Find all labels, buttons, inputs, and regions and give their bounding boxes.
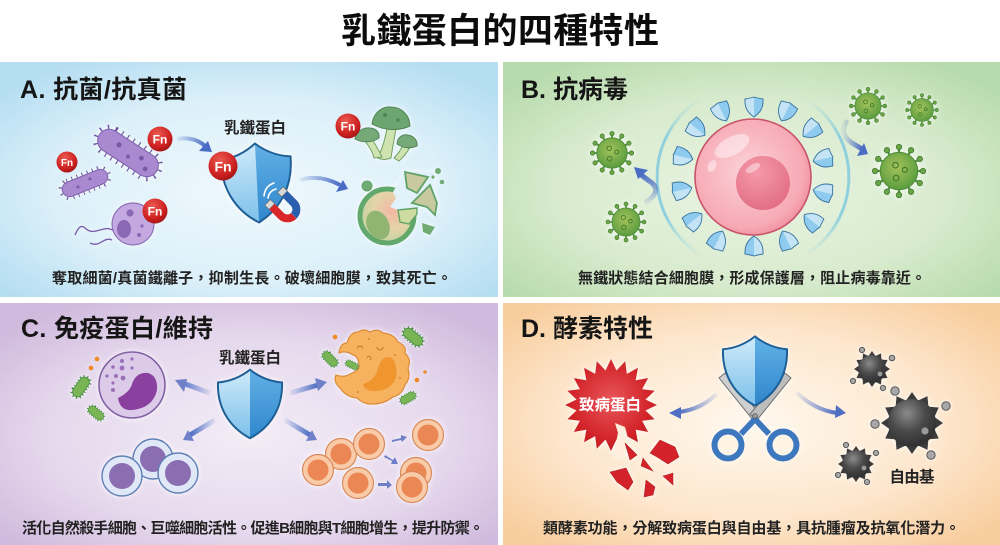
icon: virus right top <box>849 87 887 125</box>
icon: Fn badge left: Fn <box>61 158 73 169</box>
arrow: repelled virus right <box>843 120 868 156</box>
caption A: 奪取細菌/真菌鐵離子，抑制生長。破壞細胞膜，致其死亡。 <box>52 269 452 287</box>
icon: Fn badge top <box>148 126 172 152</box>
heading B: B. 抗病毒 <box>521 75 628 104</box>
icon: Fn badge bottom <box>142 198 168 224</box>
icon: central shield <box>218 370 282 438</box>
protective ring <box>657 98 849 256</box>
arrow: shield to fungi <box>300 178 348 192</box>
arrow: to NK cell <box>175 379 210 393</box>
icon: macrophage engulfing bacteria <box>321 326 427 405</box>
heading A: A. 抗菌/抗真菌 <box>20 75 187 104</box>
icon: Fn badge on shield <box>208 152 238 180</box>
icon: green mushrooms <box>355 107 417 161</box>
label: pathogenic protein: 致病蛋白 <box>579 395 641 414</box>
icon: virus far right <box>906 94 938 126</box>
arrow: to lymphocytes <box>183 420 215 441</box>
icon: free radical large <box>871 387 950 459</box>
icon: virus left top <box>590 131 634 175</box>
label: lactoferrin: 乳鐵蛋白 <box>224 118 286 137</box>
icon: host cell with nucleus <box>695 119 811 235</box>
arrow: to macrophage <box>290 378 327 393</box>
icon: Fn badge by mushrooms <box>336 114 360 138</box>
panel: A antibacterial / antifungal <box>0 62 498 297</box>
icon: Fn badge bottom: Fn <box>148 204 162 218</box>
arrow: to B and T cells <box>285 420 317 441</box>
icon: red pathogenic protein burst <box>565 359 679 497</box>
icon: proliferating orange cells <box>302 420 444 502</box>
icon: Fn badge by mushrooms: Fn <box>341 120 355 134</box>
label: free radicals: 自由基 <box>890 468 935 486</box>
icon: round flagellated bacterium <box>75 203 154 245</box>
icon: large purple rod bacterium <box>93 125 163 181</box>
arrow: repelled virus left <box>634 167 656 203</box>
icon: Fn badge on shield: Fn <box>214 158 232 174</box>
caption D: 類酵素功能，分解致病蛋白與自由基，具抗腫瘤及抗氧化潛力。 <box>543 519 960 537</box>
heading D: D. 酵素特性 <box>521 315 653 343</box>
icon: ruptured fungal cell <box>360 168 444 243</box>
icon: Fn badge top: Fn <box>153 132 167 146</box>
icon: virus left bottom <box>606 202 646 242</box>
arrow: to free radicals <box>797 393 846 418</box>
icon: free radical top <box>850 347 895 391</box>
icon: Fn badge left <box>56 152 78 172</box>
label: lactoferrin: 乳鐵蛋白 <box>219 348 281 367</box>
icon: small purple rod bacterium <box>60 167 110 199</box>
heading C: C. 免疫蛋白/維持 <box>21 315 213 343</box>
icon: natural killer cell <box>99 352 165 418</box>
icon: green bacteria and particles near NK cell <box>71 357 105 422</box>
title: 乳鐵蛋白的四種特性 <box>341 12 659 51</box>
caption B: 無鐵狀態結合細胞膜，形成保護層，阻止病毒靠近。 <box>578 269 926 287</box>
caption C: 活化自然殺手細胞、巨噬細胞活性。促進B細胞與T細胞增生，提升防禦。 <box>22 519 484 537</box>
icon: virus right large <box>872 144 926 198</box>
icon: purple lymphocyte cluster <box>102 439 198 496</box>
icon: free radical bottom <box>835 442 879 485</box>
panel: C immune regulation <box>0 303 498 545</box>
panel: D enzymatic property <box>503 303 1000 545</box>
arrow: bacteria to shield <box>177 138 212 152</box>
icon: shield with magnet <box>220 142 303 225</box>
icon: shield scissors <box>714 336 796 458</box>
arrow: to pathogenic protein <box>669 394 717 419</box>
panel: B antiviral <box>503 62 1000 297</box>
icon: ring of lactoferrin shields <box>670 97 835 256</box>
